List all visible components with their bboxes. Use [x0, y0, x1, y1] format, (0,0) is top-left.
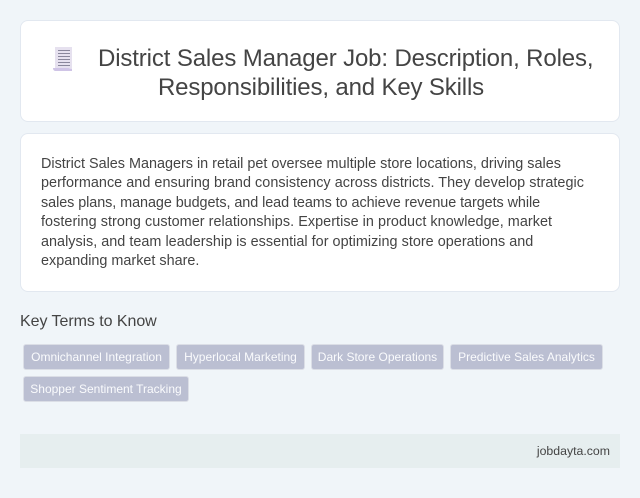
- header panel: [20, 20, 620, 122]
- heading: key terms: Key Terms to Know: [20, 313, 157, 330]
- title: [98, 45, 593, 101]
- description text: sales plans, manage budgets, and lead teams to achieve revenue targets while: [41, 195, 540, 211]
- footer source text: jobdayta.com: [537, 444, 610, 458]
- title: Responsibilities, and Key Skills: [158, 74, 484, 101]
- footer bar: [20, 434, 620, 468]
- description text: District Sales Managers in retail pet oversee multiple store locations, driving sales: [41, 156, 561, 172]
- tag: predictive sales analytics: Predictive Sales Analytics: [458, 350, 595, 364]
- description panel: [20, 133, 620, 292]
- tag: omnichannel integration: [23, 344, 170, 370]
- tag: shopper sentiment tracking: Shopper Sentiment Tracking: [30, 382, 182, 396]
- tag: dark store operations: [311, 344, 444, 370]
- tag: omnichannel integration: Omnichannel Integration: [31, 350, 162, 364]
- description text: fostering strong customer relationships. Expertise in product knowledge, market: [41, 214, 552, 230]
- title: District Sales Manager Job: Description, Roles,: [98, 45, 593, 72]
- icon: receipt document: [53, 47, 72, 71]
- description text: analysis, and team leadership is essential for optimizing store operations and: [41, 234, 533, 250]
- description text: performance and ensuring brand consistency across districts. They develop strategic: [41, 175, 584, 191]
- tag: predictive sales analytics: [450, 344, 603, 370]
- tag: dark store operations: Dark Store Operations: [318, 350, 437, 364]
- tag: shopper sentiment tracking: [23, 376, 189, 402]
- tag: hyperlocal marketing: [176, 344, 305, 370]
- tag: hyperlocal marketing: Hyperlocal Marketing: [184, 350, 297, 364]
- description text: expanding market share.: [41, 253, 199, 269]
- description text: [41, 156, 584, 269]
